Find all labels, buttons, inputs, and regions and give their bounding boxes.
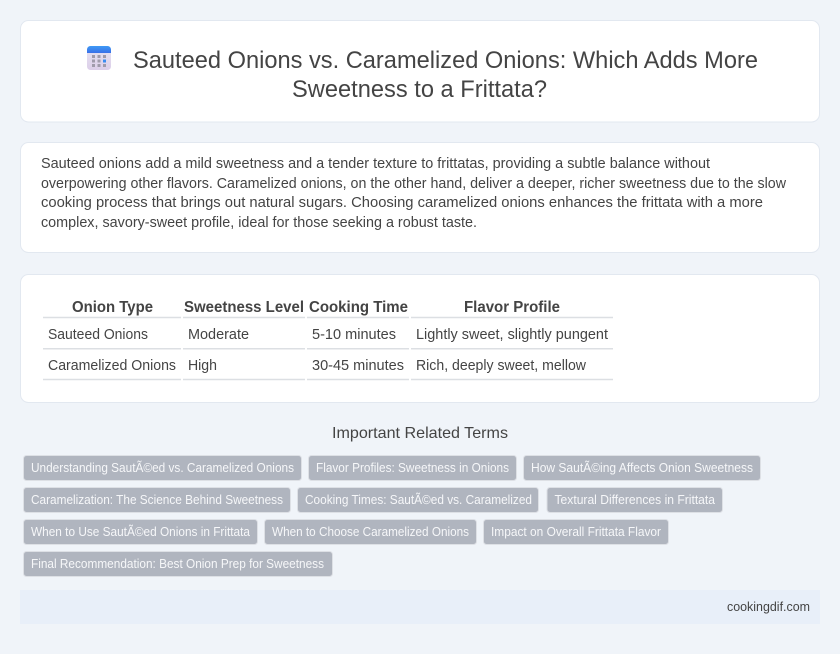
table row: caramelized onions: 30-45 minutes: [312, 357, 404, 374]
tag: [484, 520, 668, 544]
table row: sauteed onions: Lightly sweet, slightly pungent: [416, 326, 609, 343]
tag: [524, 456, 760, 480]
tag: When to Use SautÃ©ed Onions in Frittata: [31, 525, 250, 539]
tag: [24, 520, 258, 544]
footer: cookingdif.com: [727, 599, 810, 614]
table row: caramelized onions: High: [188, 357, 217, 374]
tag: Cooking Times: SautÃ©ed vs. Caramelized: [305, 493, 532, 507]
tag: [264, 520, 476, 544]
text block: introduction: overpowering other flavors. Caramelized onions, on the other hand, deliver a deeper, richer sweetness due to the slow: [41, 175, 786, 192]
footer: [20, 590, 820, 624]
table header: Onion Type: [72, 299, 153, 316]
table row: sauteed onions: [48, 326, 609, 343]
tag: [24, 456, 302, 480]
tag: When to Choose Caramelized Onions: [272, 525, 469, 539]
tags: related terms: [24, 456, 760, 576]
tag: Understanding SautÃ©ed vs. Caramelized Onions: [31, 461, 294, 475]
table row: sauteed onions: Sauteed Onions: [48, 326, 148, 343]
table row: caramelized onions: Rich, deeply sweet, mellow: [416, 357, 586, 374]
tag: Textural Differences in Frittata: [554, 493, 715, 507]
tag: [24, 552, 332, 576]
tag: Final Recommendation: Best Onion Prep for Sweetness: [31, 557, 324, 571]
panel: header: [20, 20, 820, 122]
text block: introduction: Sauteed onions add a mild sweetness and a tender texture to frittatas, providing a subtle balance without: [41, 155, 711, 172]
table row: caramelized onions: [48, 357, 586, 374]
tag: [308, 456, 516, 480]
tag: [24, 488, 290, 512]
table header: [72, 299, 560, 316]
table row: caramelized onions: Caramelized Onions: [48, 357, 176, 374]
tag: [547, 488, 722, 512]
tag: Impact on Overall Frittata Flavor: [491, 525, 661, 539]
panel: comparison table: [20, 274, 820, 402]
panel: introduction: [20, 142, 820, 252]
tag: [298, 488, 538, 512]
tag: How SautÃ©ing Affects Onion Sweetness: [531, 461, 753, 475]
icon: calendar: [87, 46, 111, 70]
tag: Flavor Profiles: Sweetness in Onions: [316, 461, 509, 475]
title: [133, 47, 758, 103]
text block: introduction: [41, 155, 786, 231]
table header: Sweetness Level: [184, 299, 304, 316]
tag: Caramelization: The Science Behind Sweetness: [31, 493, 283, 507]
text block: introduction: complex, savory-sweet profile, ideal for those seeking a robust taste.: [41, 214, 477, 231]
table row: sauteed onions: 5-10 minutes: [312, 326, 396, 343]
title: Sweetness to a Frittata?: [292, 76, 547, 103]
table header: Flavor Profile: [464, 299, 560, 316]
text block: introduction: cooking process that brings out natural sugars. Choosing caramelized onions enhances the frittata with a more: [41, 194, 763, 211]
heading: related terms: Important Related Terms: [332, 425, 508, 442]
title: Sauteed Onions vs. Caramelized Onions: Which Adds More: [133, 47, 758, 74]
table row: sauteed onions: Moderate: [188, 326, 249, 343]
table header: Cooking Time: [309, 299, 408, 316]
